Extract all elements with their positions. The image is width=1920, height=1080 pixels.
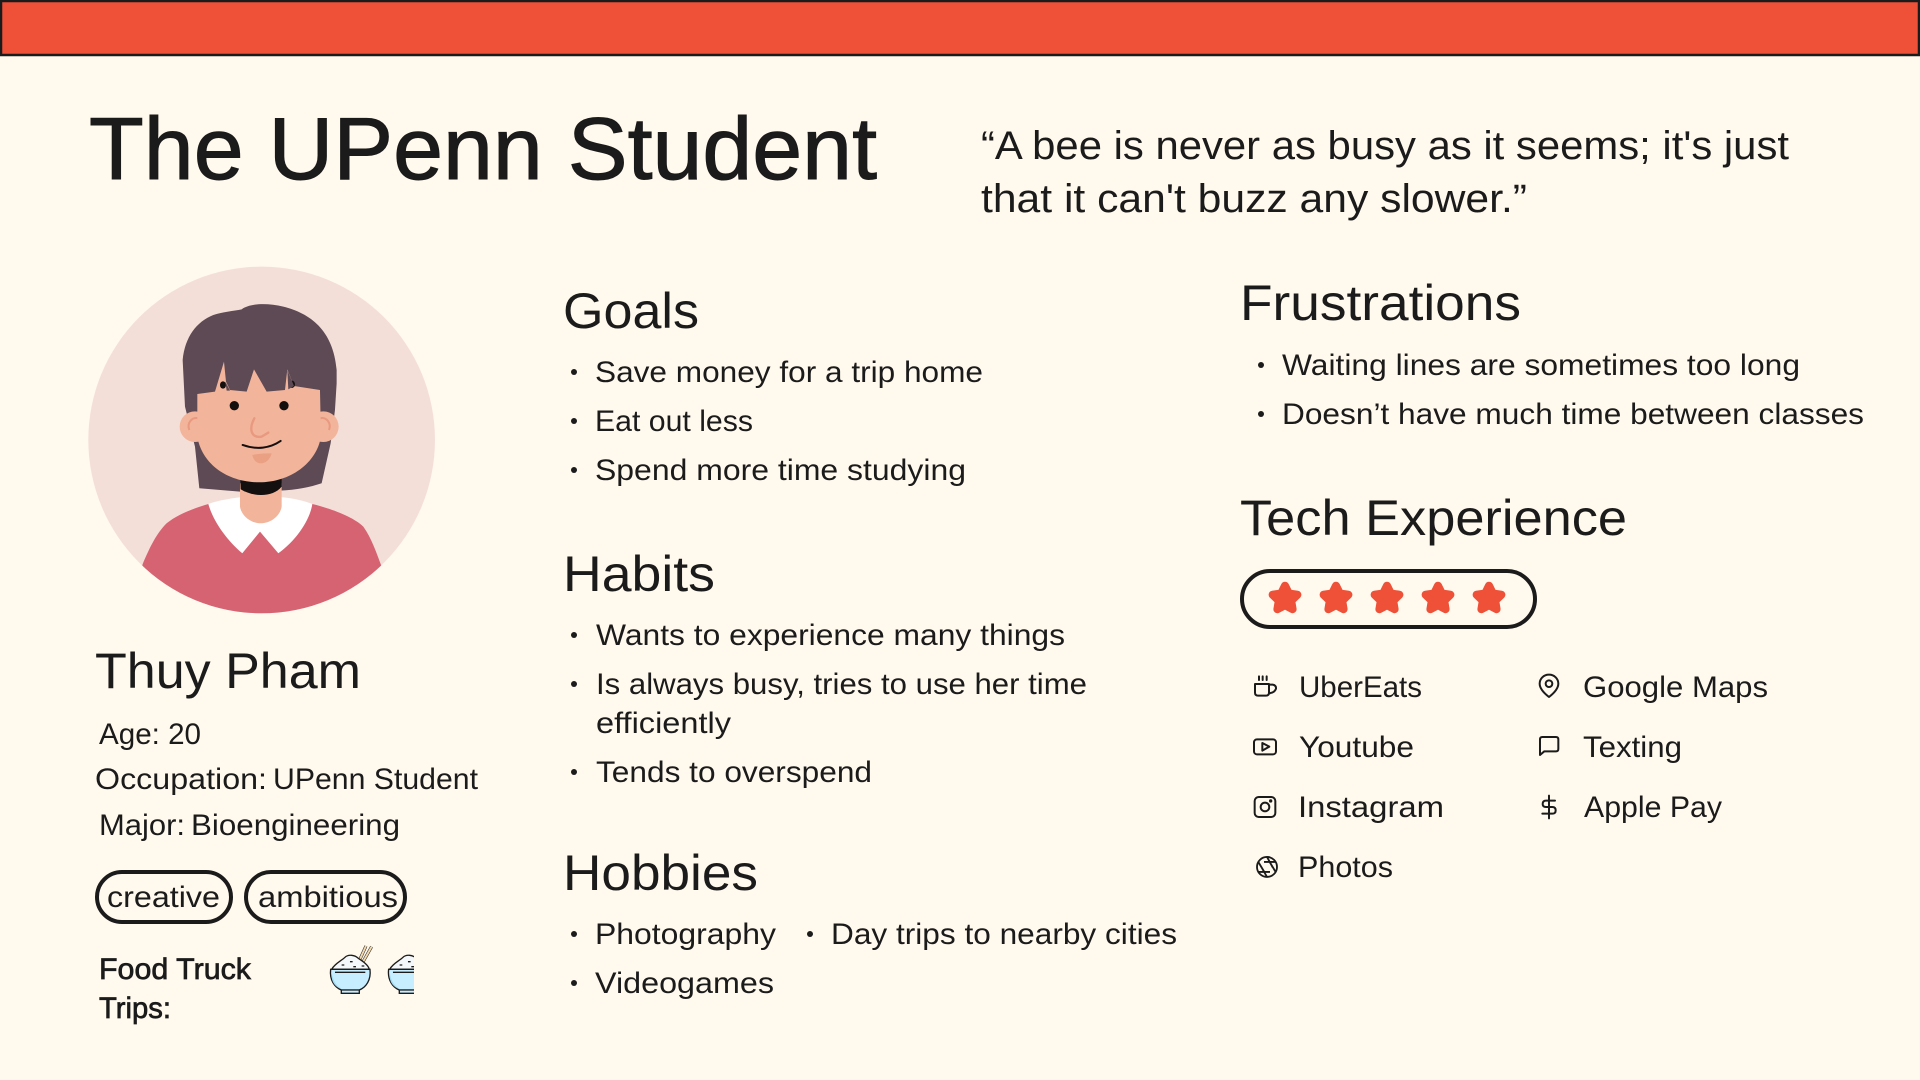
heading: hobbies: Hobbies — [563, 845, 758, 901]
habits list: Wants to experience many things — [596, 619, 1065, 652]
habits list: efficiently — [596, 707, 731, 740]
habits list: Is always busy, tries to use her time — [596, 668, 1087, 701]
title: The UPenn Student — [89, 99, 877, 198]
app: Youtube: Youtube — [1299, 731, 1414, 764]
persona details: UPenn Student — [273, 763, 479, 796]
hobbies list: Videogames — [595, 967, 774, 1000]
panel: profile — [88, 267, 479, 1025]
heading: habits: Habits — [563, 546, 715, 602]
app: Google Maps: Google Maps — [1583, 671, 1768, 704]
frustrations list: Doesn’t have much time between classes — [1282, 398, 1864, 431]
app: Texting — [1540, 731, 1682, 764]
app: Texting: Texting — [1583, 731, 1682, 764]
panel: tech experience — [1240, 490, 1768, 884]
hobbies list: Day trips to nearby cities — [831, 918, 1177, 951]
goals list: Save money for a trip home — [595, 356, 983, 389]
panel: hobbies — [563, 845, 1177, 1000]
app: Photos: Photos — [1298, 851, 1393, 884]
heading: tech experience: Tech Experience — [1240, 490, 1627, 546]
tag: creative — [97, 872, 231, 922]
tag: creative: creative — [107, 881, 220, 914]
food truck trips label: Trips: — [99, 992, 171, 1025]
persona details: Age: 20 — [99, 718, 201, 751]
persona details: Major: — [99, 809, 185, 842]
food truck trips label: Food Truck — [99, 953, 252, 986]
app: Youtube — [1254, 731, 1414, 764]
panel: frustrations — [1240, 275, 1864, 431]
icon: rice bowl 1 — [330, 946, 372, 993]
star rating pill — [1242, 571, 1535, 627]
avatar portrait — [88, 267, 435, 617]
frustrations list: Waiting lines are sometimes too long — [1282, 349, 1800, 382]
icon: rice bowl 2 clipped — [388, 954, 414, 994]
habits list: Tends to overspend — [596, 756, 872, 789]
heading: goals: Goals — [563, 283, 699, 339]
tag: ambitious — [246, 872, 405, 922]
persona details: Bioengineering — [191, 809, 400, 842]
food truck trips label — [99, 953, 252, 1025]
persona details — [95, 718, 479, 842]
app: Apple Pay: Apple Pay — [1584, 791, 1722, 824]
panel: habits — [563, 546, 1087, 789]
persona name: Thuy Pham — [95, 643, 361, 699]
hobbies list: Photography — [595, 918, 776, 951]
tag: ambitious: ambitious — [258, 881, 398, 914]
persona details: Occupation: — [95, 763, 267, 796]
app: UberEats: UberEats — [1299, 671, 1422, 704]
goals list — [571, 356, 983, 487]
habits list — [571, 619, 1087, 789]
hobbies list — [571, 918, 1177, 1000]
quote: that it can't buzz any slower.” — [981, 177, 1527, 221]
heading: frustrations: Frustrations — [1240, 275, 1521, 331]
frustrations list — [1258, 349, 1864, 431]
app: Instagram: Instagram — [1298, 791, 1444, 824]
app: Photos — [1257, 851, 1393, 884]
quote: “A bee is never as busy as it seems; it's just — [981, 124, 1789, 168]
goals list: Spend more time studying — [595, 454, 966, 487]
goals list: Eat out less — [595, 405, 753, 438]
icons: rice bowls — [330, 945, 414, 994]
quote — [981, 124, 1789, 221]
top banner — [1, 1, 1919, 55]
panel: goals — [563, 283, 983, 487]
